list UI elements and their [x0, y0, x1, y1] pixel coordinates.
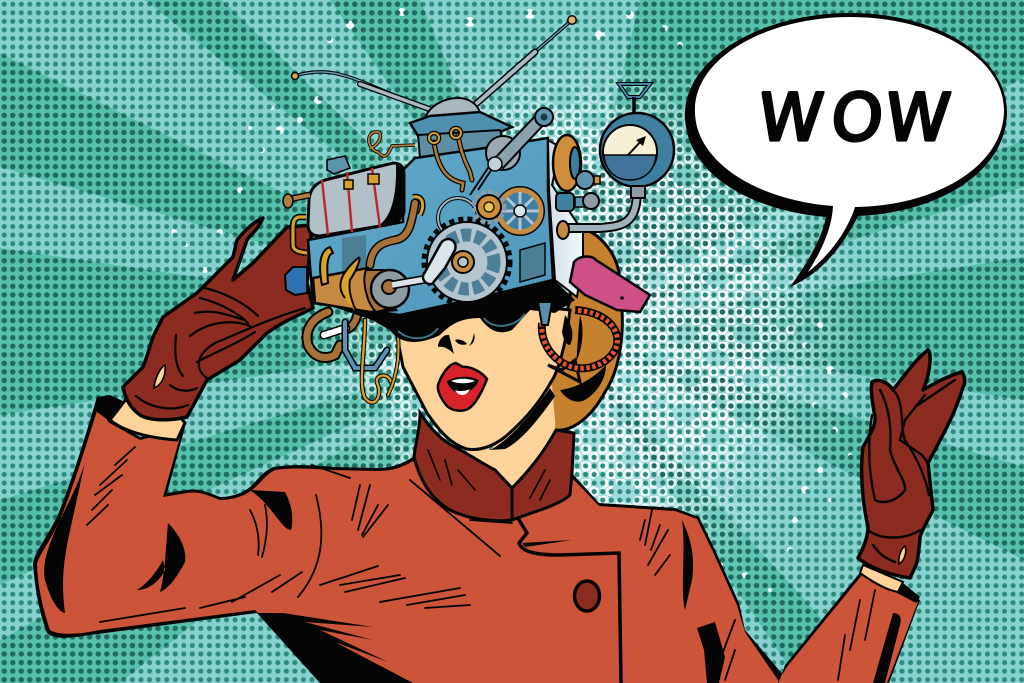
gauge pipe — [568, 190, 637, 228]
neck and face — [395, 300, 580, 490]
goggle glints — [398, 314, 525, 338]
shading: right sleeve and shoulder — [682, 520, 901, 683]
top dome — [425, 98, 480, 118]
shading: left sleeve — [44, 462, 292, 613]
button — [574, 581, 600, 611]
collar — [414, 413, 574, 521]
flange — [371, 270, 409, 308]
coat — [33, 395, 920, 683]
jaw shadow — [490, 388, 555, 450]
curled wire — [369, 132, 415, 156]
cuff: left wrist skin — [110, 398, 185, 440]
brass cylinder — [313, 268, 396, 312]
hair — [545, 225, 622, 430]
blue knob — [285, 267, 307, 295]
side plate — [548, 140, 583, 297]
speech bubble with WOW — [685, 13, 1007, 287]
yellow handle — [293, 217, 307, 253]
word: WOW: WOW — [755, 81, 953, 156]
glove slit — [899, 546, 906, 564]
nose — [438, 333, 475, 354]
visor — [313, 278, 575, 342]
large gear — [425, 198, 509, 304]
knobs — [556, 171, 600, 211]
water tank — [308, 156, 404, 236]
crank — [423, 239, 456, 284]
lips — [438, 363, 487, 411]
corner plate — [520, 243, 545, 282]
pink strap — [570, 256, 650, 312]
cable clamp — [538, 302, 552, 325]
yellow fitting — [413, 197, 423, 215]
glove: left hand — [123, 218, 313, 420]
blue body — [308, 138, 553, 315]
red cable — [542, 310, 617, 368]
brass rod — [284, 195, 310, 200]
gear wheel — [474, 187, 544, 235]
filler cap — [327, 156, 350, 174]
back gear and lever — [486, 108, 553, 171]
hair strands at ear — [562, 315, 583, 362]
dark panel — [342, 235, 366, 272]
fold lines — [87, 447, 875, 680]
top plate — [410, 112, 512, 139]
earring — [548, 360, 580, 382]
gauge — [600, 84, 674, 198]
lower pipes — [307, 312, 399, 402]
right wrist — [860, 565, 920, 603]
underarm shadow — [257, 613, 413, 683]
placket — [516, 515, 621, 683]
glove: right hand — [858, 350, 965, 578]
orange disc — [553, 135, 581, 191]
yellow band — [340, 258, 360, 315]
headset — [283, 16, 674, 402]
antennas — [295, 20, 572, 111]
chain belt — [470, 160, 498, 195]
piston rod — [392, 278, 432, 285]
copper wires — [370, 135, 472, 265]
glove slit — [154, 365, 165, 388]
